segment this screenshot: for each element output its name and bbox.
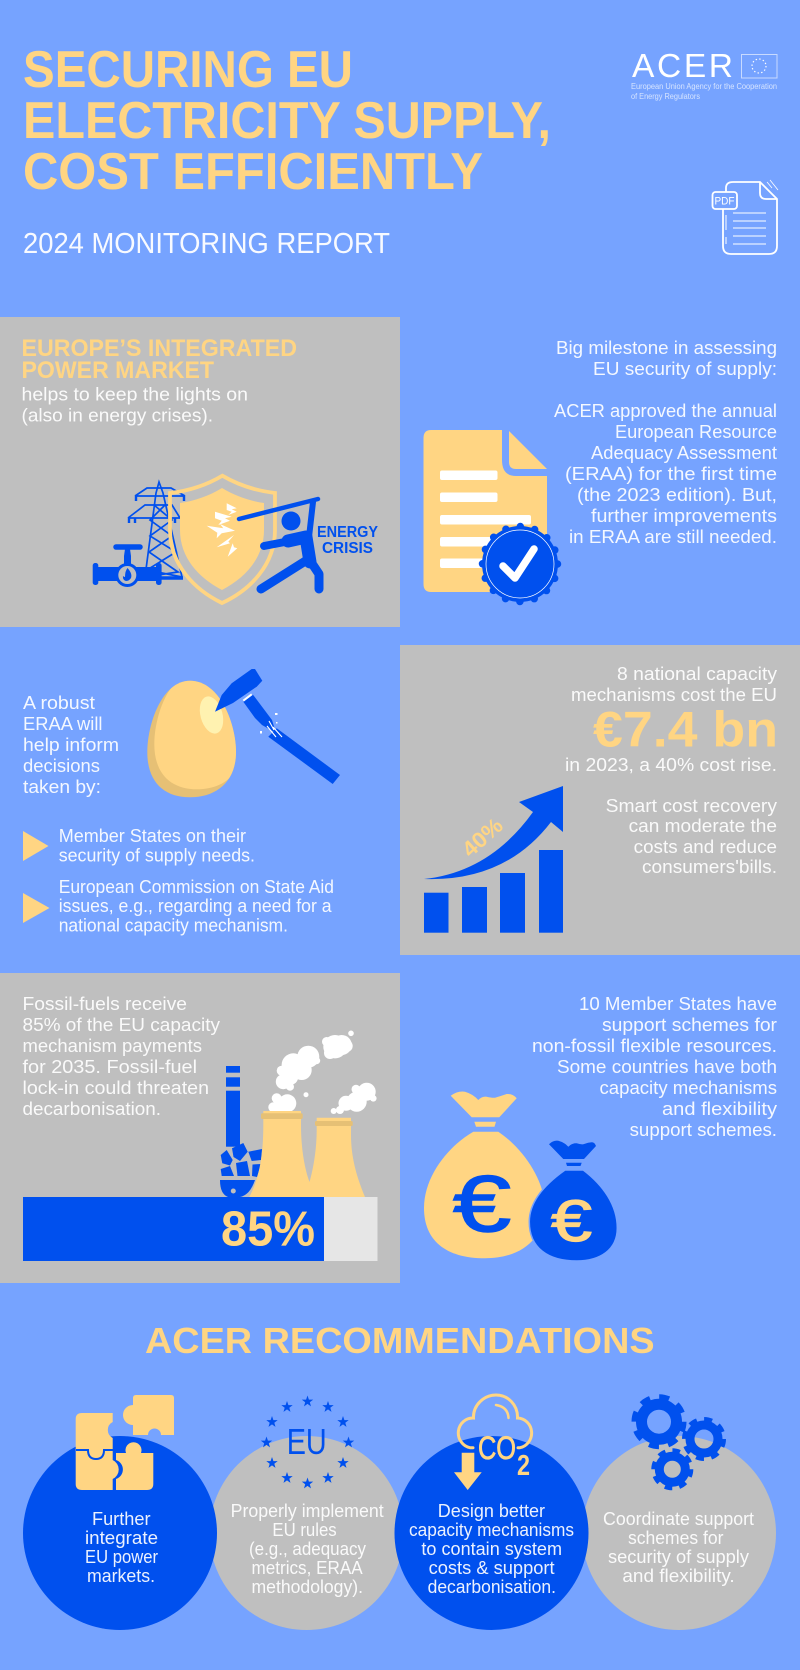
text: fossil fuel payments (22, 993, 221, 1119)
text: smart cost recovery (606, 795, 778, 877)
text: smart cost recovery: Smart cost recovery (606, 795, 778, 816)
icon: approved document (424, 430, 558, 602)
text: keeps the lights on (22, 384, 248, 426)
text: big milestone: (the 2023 edition). But, (577, 484, 777, 505)
icon: puzzle (76, 1395, 174, 1490)
icon: CO2 cloud (454, 1395, 532, 1490)
heading: integrated power market (22, 335, 297, 384)
text: better capacity mechanisms: to contain system (421, 1538, 562, 1559)
logo: ACER: ACER (632, 48, 733, 85)
icon: PDF document (712, 180, 778, 254)
progress bar: 85% (23, 1197, 378, 1261)
icon: hammer and egg (140, 669, 340, 805)
text: implement EU rules: EU rules (272, 1519, 337, 1540)
text: big milestone: in ERAA are still needed. (569, 526, 777, 547)
text: big milestone: European Resource (615, 421, 777, 442)
list: member states (23, 825, 255, 866)
text: big milestone: ACER approved the annual (554, 400, 777, 421)
text: big milestone (554, 337, 777, 547)
text: member states item: security of supply needs. (59, 845, 255, 866)
progress bar: 85%: 85% (221, 1202, 315, 1256)
panel: integrated power market (0, 317, 400, 627)
text: fossil fuel payments: lock-in could threaten (22, 1077, 209, 1098)
text: implement EU rules: methodology). (252, 1576, 363, 1597)
text: keeps the lights on: (also in energy crises). (22, 404, 213, 426)
text: flexibility support schemes: support schemes. (630, 1119, 777, 1140)
icon: large money bag: € (453, 1159, 511, 1248)
icon: PDF document: PDF (714, 196, 735, 208)
title (23, 40, 551, 200)
text: robust ERAA: taken by: (23, 776, 101, 797)
title: COST EFFICIENTLY (23, 142, 483, 200)
text: commission item: European Commission on State Aid (59, 876, 334, 897)
text: big milestone: EU security of supply: (593, 358, 777, 379)
label: 40%: 40% (457, 813, 508, 862)
text: big milestone: Big milestone in assessing (556, 337, 777, 358)
text: better capacity mechanisms: capacity mechanisms (409, 1519, 574, 1540)
text: coordinate support schemes: and flexibility. (622, 1565, 735, 1586)
text: flexibility support schemes: 10 Member States have (579, 993, 777, 1014)
text: commission item: national capacity mechanism. (59, 915, 288, 936)
icon: gears (634, 1397, 724, 1488)
text: implement EU rules: (e.g., adequacy (249, 1538, 367, 1559)
icon: cooling towers (249, 1111, 365, 1197)
text: flexibility support schemes: support schemes for (602, 1014, 777, 1035)
text: smart cost recovery: consumers'bills. (642, 856, 777, 877)
icon: figure striking (239, 499, 319, 589)
text: flexibility support schemes (532, 993, 778, 1140)
text: robust ERAA: A robust (23, 692, 95, 713)
logo: ACER: European Union Agency for the Cooperation (631, 82, 777, 91)
text: energy crisis: ENERGY (317, 524, 378, 541)
icon: EU stars (261, 1396, 354, 1488)
bar chart: rising costs (424, 786, 563, 933)
text: better capacity mechanisms (409, 1500, 574, 1597)
icon: hammer (215, 669, 340, 784)
circle: coordinate support schemes (582, 1397, 776, 1630)
circle: better capacity mechanisms (394, 1395, 588, 1630)
text: smart cost recovery: can moderate the (629, 815, 777, 836)
text: big milestone: (ERAA) for the first time (565, 463, 777, 484)
icon: CO2 cloud: 2 (517, 1450, 530, 1482)
title: SECURING EU (23, 40, 353, 98)
text: commission item: issues, e.g., regarding a need for a (59, 895, 332, 916)
logo: ACER (631, 48, 777, 101)
text: coordinate support schemes: security of supply (608, 1546, 750, 1567)
text: better capacity mechanisms: costs & support (429, 1557, 555, 1578)
heading: integrated power market: EUROPE’S INTEGRATED (22, 335, 297, 362)
text: smart cost recovery: costs and reduce (634, 836, 777, 857)
circle: implement EU rules (210, 1396, 404, 1630)
text: fossil fuel payments: for 2035. Fossil-fuel (22, 1056, 197, 1077)
list: european commission (23, 876, 334, 936)
text: fossil fuel payments: 85% of the EU capacity (22, 1014, 221, 1035)
text: implement EU rules: Properly implement (231, 1500, 384, 1521)
text: coordinate support schemes: schemes for (628, 1527, 724, 1548)
icon: pylon (128, 482, 185, 578)
icon: egg (147, 680, 236, 798)
text: national capacity mechanisms: 8 national capacity (617, 663, 778, 684)
icon: large money bag (424, 1091, 545, 1258)
text: coordinate support schemes (603, 1508, 754, 1586)
text: flexibility support schemes: non-fossil flexible resources. (532, 1035, 777, 1056)
icon: money bags (424, 1091, 617, 1261)
text: better capacity mechanisms: Design better (438, 1500, 545, 1521)
text: integrate EU power markets: integrate (85, 1527, 158, 1548)
text: coordinate support schemes: Coordinate support (603, 1508, 754, 1529)
text: flexibility support schemes: capacity mechanisms (600, 1077, 777, 1098)
text: fossil fuel payments: decarbonisation. (22, 1098, 161, 1119)
text: member states item: Member States on their (59, 825, 246, 846)
text: integrate EU power markets: Further (92, 1508, 150, 1529)
title: ELECTRICITY SUPPLY, (23, 91, 551, 149)
text: flexibility support schemes: Some countries have both (557, 1056, 777, 1077)
text: integrate EU power markets: EU power (85, 1546, 158, 1567)
text: energy crisis (317, 524, 378, 557)
icon: shield (170, 476, 275, 603)
icon: bullet arrow (23, 831, 48, 861)
text: commission item (59, 876, 334, 936)
text: implement EU rules: metrics, ERAA (252, 1557, 363, 1578)
icon: chimney (226, 1066, 240, 1147)
icon: check badge (482, 526, 558, 602)
text: national capacity mechanisms: mechanisms cost the EU (571, 684, 777, 705)
text: big milestone: Adequacy Assessment (591, 442, 777, 463)
text: integrate EU power markets: markets. (87, 1565, 155, 1586)
icon: small money bag: € (551, 1189, 592, 1254)
number: 7.4 bn: €7.4 bn (593, 702, 778, 758)
text: keeps the lights on: helps to keep the lights on (22, 384, 248, 404)
text: robust ERAA: decisions (23, 755, 100, 776)
circle: integrate EU power markets (23, 1395, 217, 1630)
icon: smoke (268, 1030, 377, 1116)
arrow: 40 percent rise (424, 786, 563, 879)
icon: coal plant (220, 1030, 377, 1197)
heading: integrated power market: POWER MARKET (22, 357, 214, 384)
text: flexibility support schemes: and flexibility (662, 1098, 778, 1119)
text: fossil fuel payments: mechanism payments (22, 1035, 202, 1056)
text: robust ERAA: ERAA will (23, 713, 102, 734)
text: integrate EU power markets (85, 1508, 158, 1586)
text: fossil fuel payments: Fossil-fuels receive (22, 993, 187, 1014)
panel: capacity mechanism costs (400, 645, 800, 955)
icon: shield against energy crisis (93, 476, 378, 603)
text: cost rise: in 2023, a 40% cost rise. (565, 754, 777, 775)
panel: fossil fuels (0, 973, 400, 1283)
text: better capacity mechanisms: decarbonisation. (428, 1576, 556, 1597)
icon: EU stars: EU (287, 1421, 327, 1462)
text: big milestone: further improvements (591, 505, 777, 526)
icon: small money bag (529, 1141, 617, 1261)
text: national capacity mechanisms (571, 663, 778, 705)
text: implement EU rules (231, 1500, 384, 1597)
icon: gas valve (93, 547, 162, 587)
subtitle: 2024 MONITORING REPORT (23, 228, 390, 260)
logo: ACER: of Energy Regulators (631, 92, 700, 101)
icon: coal cart (220, 1143, 262, 1197)
text: robust ERAA (23, 692, 119, 797)
text: robust ERAA: help inform (23, 734, 119, 755)
heading: ACER recommendations: ACER RECOMMENDATIONS (145, 1320, 655, 1361)
icon: bullet arrow (23, 893, 50, 923)
icon: CO2 cloud: CO (478, 1430, 516, 1466)
text: energy crisis: CRISIS (322, 540, 373, 557)
text: member states item (59, 825, 255, 866)
